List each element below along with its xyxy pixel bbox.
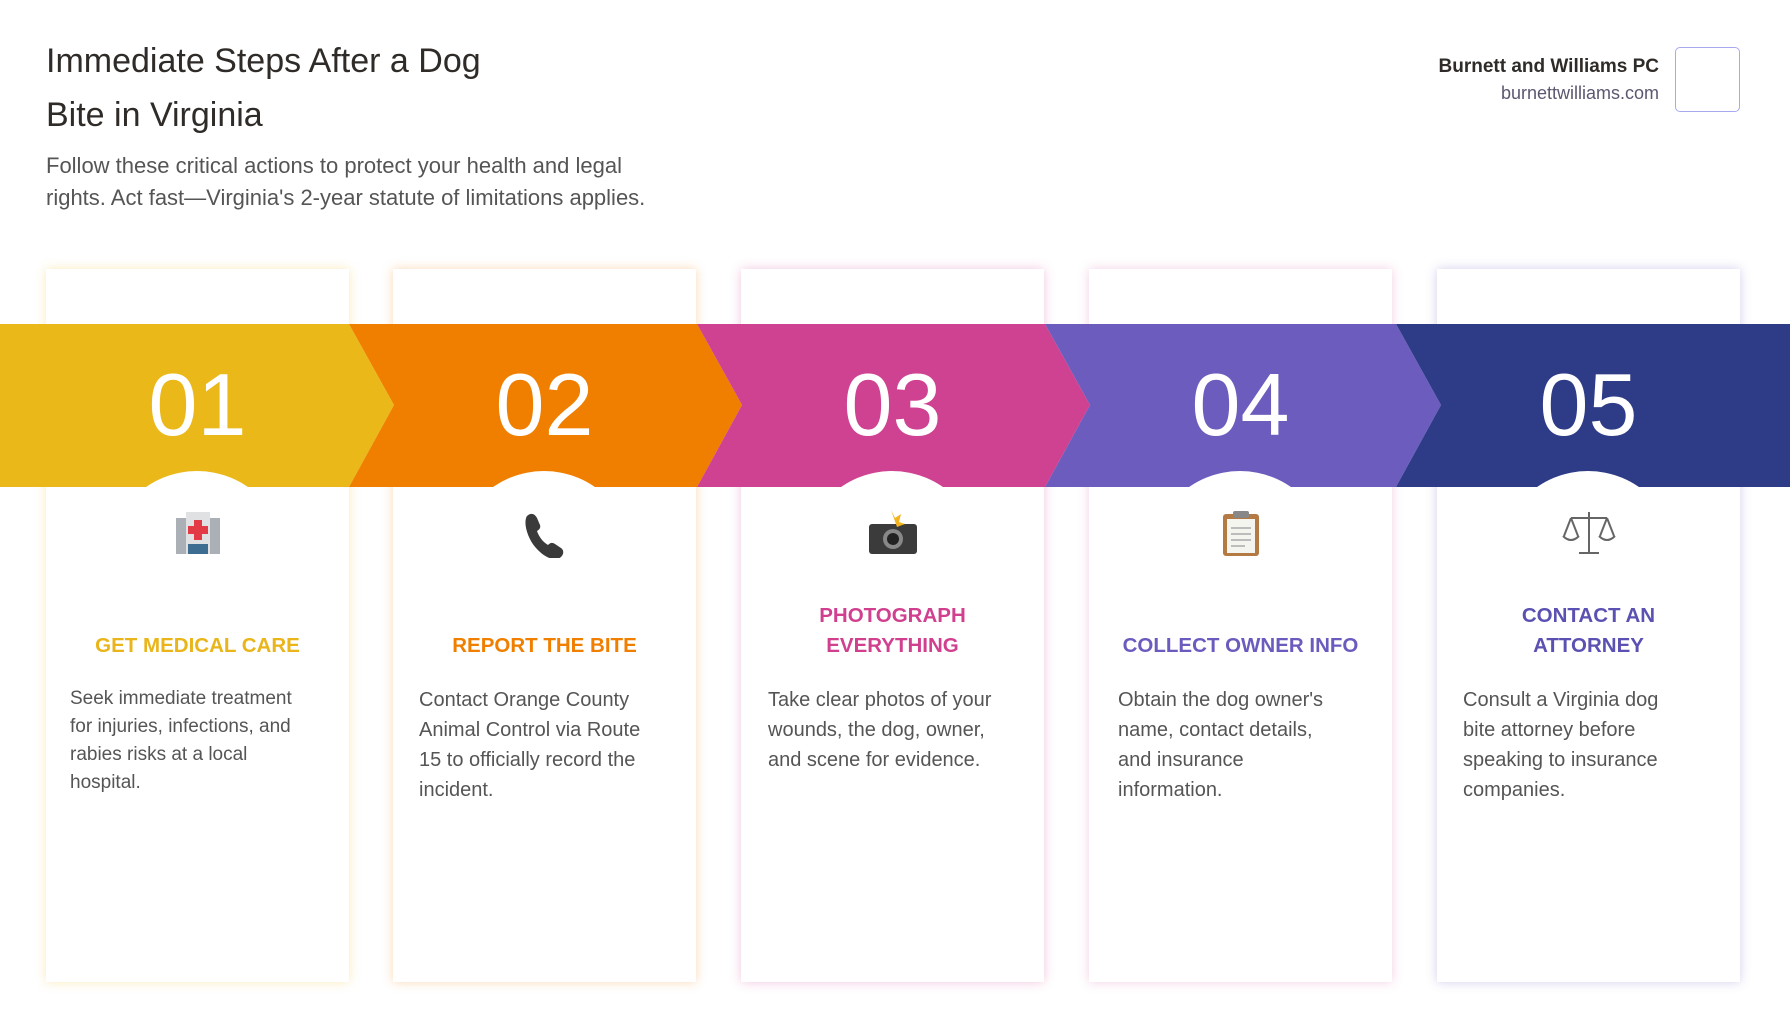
firm name: burnettwilliams.com	[1501, 83, 1659, 103]
heading 2: REPORT THE BITE	[452, 634, 637, 657]
card 3	[741, 269, 1044, 982]
heading 5: ATTORNEY	[1533, 634, 1644, 657]
firm name	[1439, 56, 1659, 103]
text 3: Take clear photos of your wounds, the dog, owner, and scene for evidence.	[768, 689, 991, 771]
subtitle: Follow these critical actions to protect your health and legal rights. Act fast—Virginia's 2-year statute of limitations applies.	[46, 153, 645, 210]
heading 5	[1522, 604, 1655, 657]
icon: phone	[525, 514, 564, 558]
icon: hospital	[176, 512, 220, 554]
firm name: Burnett and Williams PC	[1439, 56, 1659, 77]
number 02: 02	[496, 355, 593, 454]
number 04: 04	[1192, 355, 1289, 454]
logo box	[1675, 47, 1740, 112]
bump 3	[841, 471, 943, 487]
bump 1	[146, 471, 248, 487]
heading 3: PHOTOGRAPH	[819, 604, 966, 627]
heading 3: EVERYTHING	[826, 634, 959, 657]
bump 5	[1537, 471, 1639, 487]
text 1: Seek immediate treatment for injuries, infections, and rabies risks at a local hospital.	[70, 688, 292, 793]
number 05: 05	[1540, 355, 1637, 454]
card 2	[393, 269, 696, 982]
icon: scales	[1562, 512, 1616, 554]
text 4: Obtain the dog owner's name, contact details, and insurance information.	[1118, 689, 1323, 801]
heading 5: CONTACT AN	[1522, 604, 1655, 627]
heading 1: GET MEDICAL CARE	[95, 634, 300, 657]
text 2: Contact Orange County Animal Control via Route 15 to officially record the incident.	[419, 689, 640, 801]
heading 3	[819, 604, 966, 657]
number 01: 01	[149, 355, 246, 454]
title: Immediate Steps After a Dog Bite in Virginia	[46, 42, 481, 134]
bump 4	[1189, 471, 1291, 487]
icon: clipboard	[1223, 511, 1259, 556]
text 5: Consult a Virginia dog bite attorney before speaking to insurance companies.	[1463, 689, 1658, 801]
bump 2	[493, 471, 595, 487]
icon: camera	[869, 510, 917, 554]
chevron band	[0, 324, 1790, 487]
card 4	[1089, 269, 1392, 982]
heading 4: COLLECT OWNER INFO	[1123, 634, 1358, 657]
card 5	[1437, 269, 1740, 982]
card 1	[46, 269, 349, 982]
number 03: 03	[844, 355, 941, 454]
